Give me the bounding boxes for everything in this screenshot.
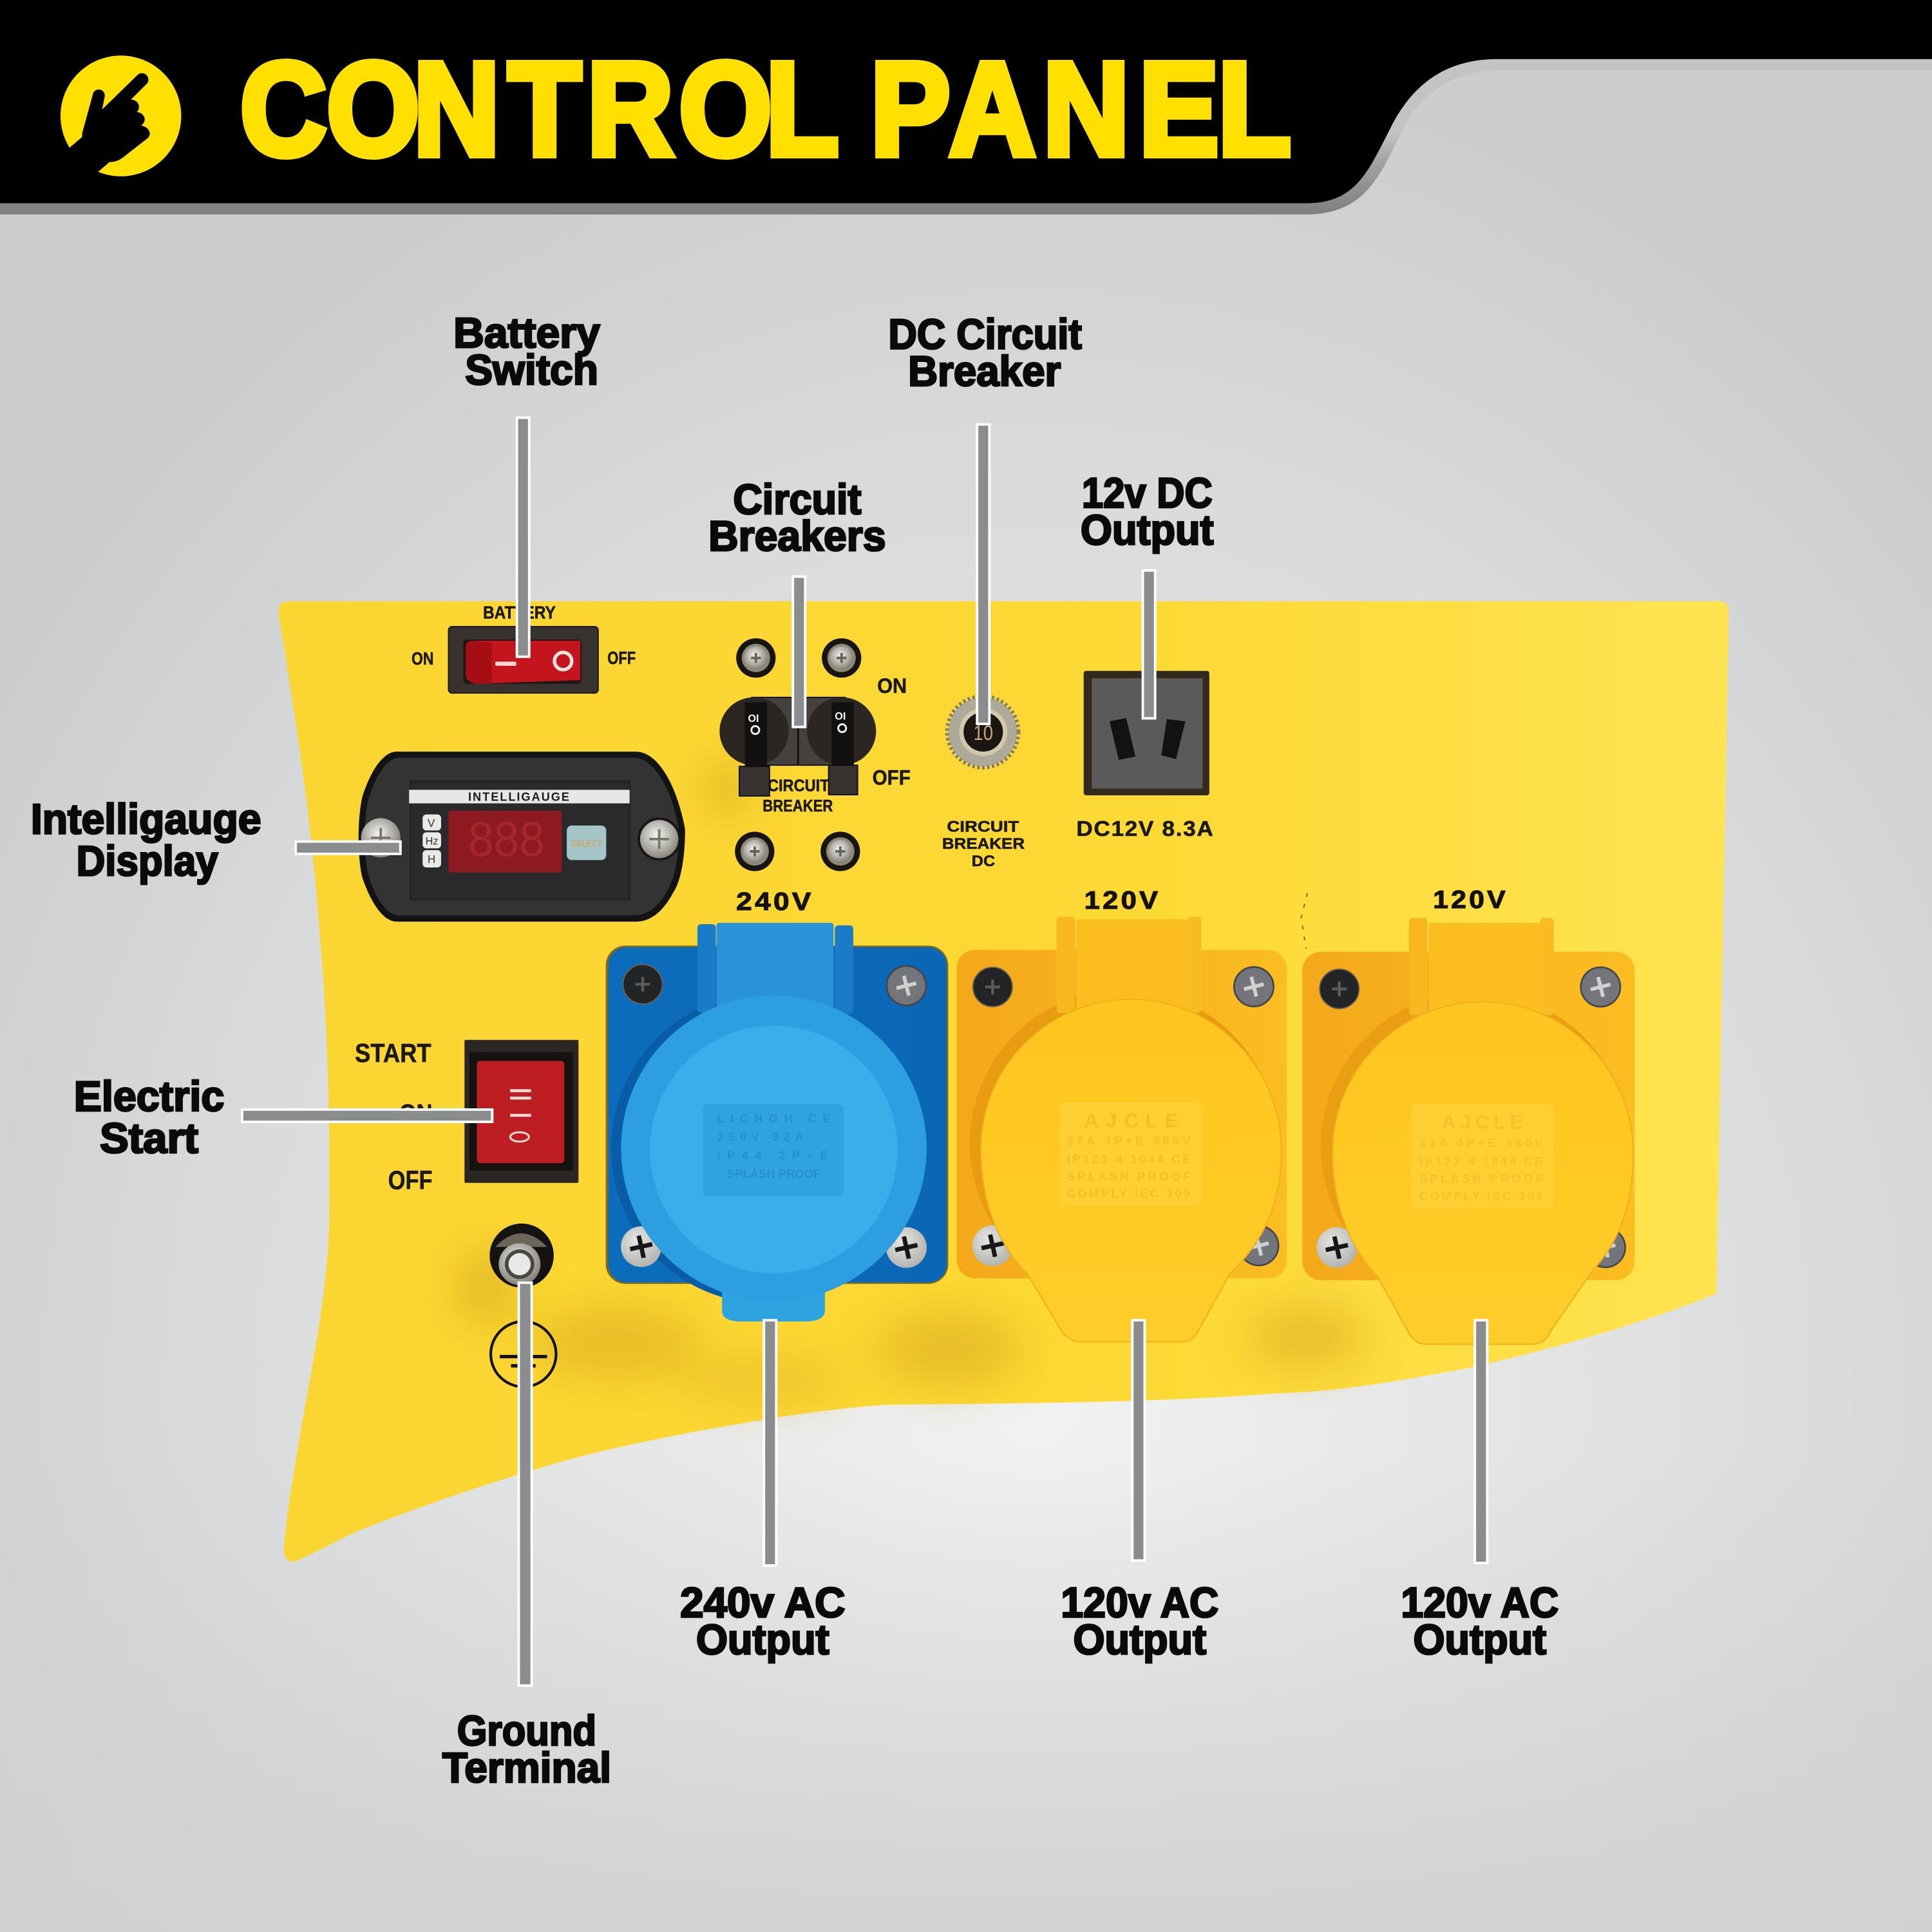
label: battery switch: Battery — [453, 309, 600, 357]
120v yellow socket right: IP123-4 1044 CE — [1419, 1155, 1542, 1168]
circuit breaker text: CIRCUIT — [768, 777, 829, 795]
120v label: 120V — [1084, 886, 1160, 914]
on text: ON — [399, 1099, 433, 1128]
240v blue socket: LICHGH CE — [717, 1112, 831, 1125]
dc circuit breaker — [947, 696, 1019, 768]
label: dc circuit breaker — [888, 310, 1082, 395]
electric start switch — [464, 1040, 578, 1183]
label: ground terminal — [442, 1707, 611, 1792]
label: circuit breakers: Circuit — [733, 475, 861, 523]
breaker off label: OFF — [873, 766, 911, 790]
label: 240v ac output — [680, 1578, 845, 1663]
label: 120v ac output — [1061, 1578, 1218, 1663]
panel shading — [460, 759, 1368, 1399]
dc breaker text — [942, 818, 1025, 870]
label: 120v ac output: 120v AC — [1401, 1578, 1558, 1626]
circuit breakers: OI — [835, 710, 846, 722]
arrow: dc circuit breaker leader — [976, 423, 990, 725]
arrow: 120v output leader — [1131, 1319, 1146, 1562]
icon: pointing hand — [61, 55, 181, 176]
label: battery switch: Switch — [465, 346, 598, 393]
120v yellow socket right: AJCLE — [1442, 1112, 1523, 1133]
arrow: intelligauge leader — [294, 840, 402, 855]
arrow: electric start leader — [241, 1108, 493, 1123]
120v yellow socket right: SPLASH PROOF — [1419, 1173, 1542, 1186]
120v label: 120V — [1433, 886, 1508, 914]
label: 12v dc output: Output — [1081, 506, 1214, 554]
breaker on label: ON — [877, 674, 907, 697]
circuit breaker screws — [735, 638, 861, 871]
120v yellow socket left: COMPLY IEC 309 — [1067, 1188, 1190, 1200]
label: intelligauge display: Display — [77, 837, 218, 884]
120v yellow socket left: IP123-4 1044 CE — [1067, 1153, 1190, 1166]
intelligauge display: 888 — [468, 813, 545, 867]
240v blue socket: IP44 2P+E — [717, 1149, 828, 1162]
dc breaker text: BREAKER — [942, 835, 1025, 853]
label: 120v ac output: Output — [1414, 1616, 1546, 1663]
off label: OFF — [607, 648, 636, 668]
label: circuit breakers: Breakers — [708, 512, 886, 560]
start text: START — [355, 1038, 431, 1068]
icon: ground symbol — [491, 1321, 556, 1387]
label: 240v ac output: 240v AC — [680, 1578, 845, 1626]
120v yellow socket right: 32A 4P+E 380V — [1419, 1137, 1542, 1150]
ground terminal — [489, 1224, 554, 1287]
circuit breakers: OI — [748, 713, 759, 724]
intelligauge display: INTELLIGAUGE — [468, 791, 569, 804]
240v blue socket — [606, 923, 948, 1321]
label: 240v ac output: Output — [696, 1616, 829, 1663]
12v dc socket — [1084, 671, 1209, 795]
arrow: battery switch leader — [516, 417, 531, 658]
dc breaker text: DC — [972, 853, 995, 870]
intelligauge display: V — [428, 817, 435, 829]
240v blue socket: 250V 32A — [717, 1131, 803, 1144]
240v label: 240V — [736, 887, 814, 916]
intelligauge display: H — [428, 853, 435, 866]
120v yellow socket right — [1301, 893, 1634, 1344]
label: battery switch — [453, 309, 600, 393]
label: intelligauge display — [31, 795, 261, 884]
arrow: 12v dc leader — [1142, 569, 1157, 719]
label: 120v ac output: Output — [1073, 1616, 1206, 1663]
label: 12v dc output: 12v DC — [1082, 469, 1213, 516]
panel: yellow control panel — [278, 601, 1729, 1562]
120v yellow socket left: AJCLE — [1084, 1110, 1178, 1132]
title: CONTROL PANEL — [240, 35, 1291, 183]
circuit breaker text: BREAKER — [762, 797, 833, 815]
label: intelligauge display: Intelligauge — [31, 795, 261, 842]
header banner — [0, 0, 1932, 214]
label: 120v ac output: 120v AC — [1061, 1578, 1218, 1626]
on label: ON — [412, 649, 433, 668]
off text: OFF — [388, 1165, 433, 1195]
dc socket rating: DC12V 8.3A — [1076, 817, 1215, 841]
battery label: BATTERY — [483, 602, 556, 622]
label: 12v dc output — [1081, 469, 1214, 554]
intelligauge display: SELECT — [571, 838, 602, 849]
120v yellow socket left — [956, 916, 1287, 1342]
circuit breaker text — [762, 777, 833, 815]
label: electric start: Start — [100, 1114, 198, 1162]
label: ground terminal: Terminal — [442, 1744, 611, 1792]
intelligauge display — [359, 752, 685, 922]
120v yellow socket left: 32A 4P+E 380V — [1067, 1134, 1190, 1147]
arrow: circuit breakers leader — [791, 575, 806, 728]
120v yellow socket right: COMPLY IEC 309 — [1419, 1190, 1542, 1203]
arrow: ground terminal leader — [518, 1282, 533, 1687]
arrow: 240v output leader — [762, 1319, 777, 1567]
label: 120v ac output — [1401, 1578, 1558, 1663]
arrow: 120v output leader — [1473, 1319, 1488, 1564]
120v yellow socket left: SPLASH PROOF — [1067, 1170, 1190, 1183]
label: electric start: Electric — [74, 1072, 224, 1120]
circuit breakers — [719, 697, 876, 796]
label: circuit breakers — [708, 475, 886, 560]
240v blue socket: SPLASH PROOF — [727, 1168, 820, 1180]
battery switch — [448, 627, 598, 693]
dc breaker text: CIRCUIT — [947, 818, 1019, 835]
label: dc circuit breaker: Breaker — [908, 347, 1061, 395]
label: ground terminal: Ground — [457, 1707, 596, 1754]
intelligauge display: Hz — [426, 836, 439, 848]
label: electric start — [74, 1072, 224, 1162]
label: dc circuit breaker: DC Circuit — [888, 310, 1082, 357]
dc circuit breaker: 10 — [973, 721, 993, 744]
